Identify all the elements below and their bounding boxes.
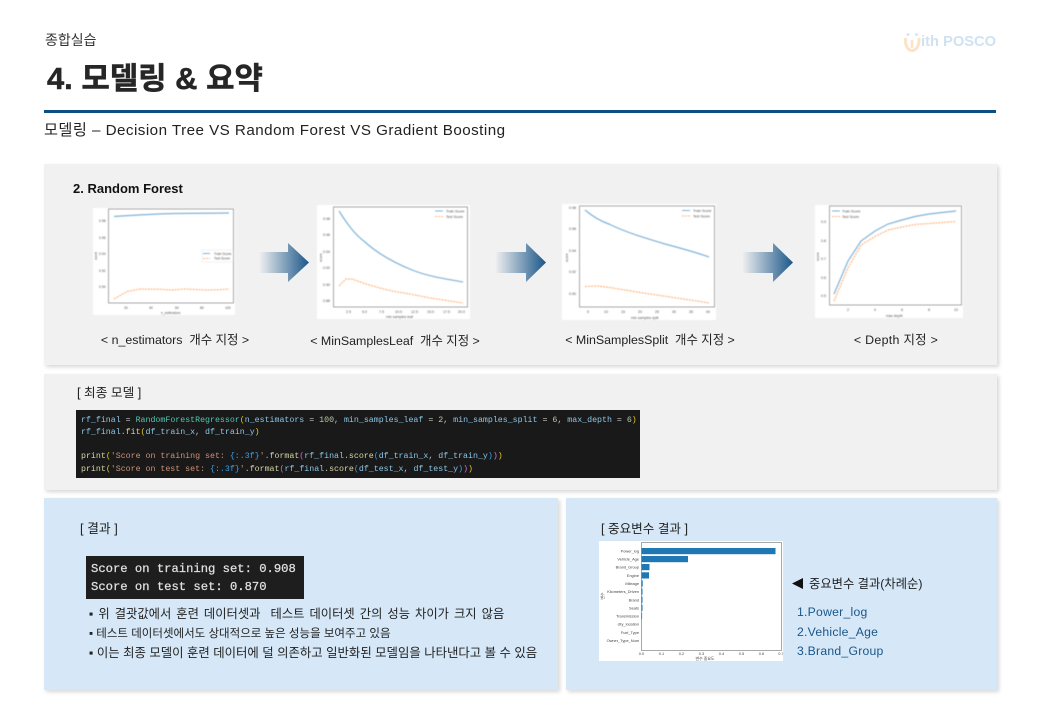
chart: min samples leaf: 17.5 [443, 310, 450, 314]
chart: n_estimators: 0.96 [99, 236, 106, 240]
chart: max depth: Train Score [842, 210, 860, 214]
chart: min samples split: 30 [672, 310, 676, 314]
chart: min samples split: 10 [604, 310, 608, 314]
chart: n_estimators: 60 [175, 306, 179, 310]
chart: n_estimators [93, 208, 235, 316]
chart: variable importance: Power_log [621, 548, 639, 554]
chart: max depth: 10 [954, 308, 958, 312]
chart: variable importance: 0.6 [759, 651, 764, 656]
top 3 variables: 1.Power_log 2.Vehicle_Age 3.Brand_Group [797, 605, 884, 658]
logo: With POSCO: ith POSCO [921, 34, 996, 50]
result bullets [89, 607, 537, 660]
chart: variable importance: 변수 중요도 [696, 656, 715, 661]
chart: variable importance [599, 541, 783, 661]
chart: min samples split: 20 [638, 310, 642, 314]
chart: max depth: 0.5 [821, 294, 826, 298]
chart: variable importance: Brand_Group [616, 564, 639, 570]
chart: variable importance: 0.1 [659, 651, 664, 656]
chart: min samples leaf: 12.5 [411, 310, 418, 314]
chart: max depth: score [816, 252, 820, 261]
chart: variable importance: Mileage [625, 581, 639, 586]
note: ranking heading: 중요변수 결과(차례순) [809, 577, 922, 591]
chart: n_estimators: 40 [149, 306, 153, 310]
score output [86, 556, 304, 599]
chart: min samples leaf: 0.98 [323, 217, 330, 221]
chart: min samples leaf: score [319, 253, 323, 262]
chart: min samples split: 0.92 [569, 270, 576, 274]
chart: max depth: 4 [874, 308, 876, 312]
chart: min samples leaf: 0.90 [323, 283, 330, 287]
chart: n_estimators: 20 [124, 306, 128, 310]
arrow [497, 243, 546, 282]
chart: min samples leaf: 0.92 [323, 266, 330, 270]
caption: MinSamplesSplit: < MinSamplesSplit 개수 지정 > [565, 333, 735, 347]
chart: variable importance: Vehicle_Age [617, 556, 639, 562]
caption: MinSamplesLeaf: < MinSamplesLeaf 개수 지정 > [310, 334, 480, 348]
chart: max depth: Test Score [842, 215, 859, 219]
chart: min samples split: 15 [621, 310, 625, 314]
score output: Score on training set: 0.908 Score on test set: 0.870 [91, 562, 296, 594]
chart: min samples leaf: 2.5 [346, 310, 351, 314]
chart: n_estimators: n_estimators [161, 311, 181, 315]
chart: min samples leaf: 20.0 [458, 310, 465, 314]
chart: max depth: 0.7 [821, 257, 826, 261]
chart: min samples split: min samples split [631, 316, 659, 320]
result bullets: ▪ 테스트 데이터셋에서도 상대적으로 높은 성능을 보여주고 있음 [89, 628, 391, 640]
chart: min samples leaf: 5.0 [362, 310, 367, 314]
chart: max depth: 6 [901, 308, 903, 312]
chart: min samples leaf: 7.5 [379, 310, 384, 314]
chart: max depth [815, 205, 963, 318]
chart: min samples leaf: Train Score [446, 209, 464, 213]
chart: n_estimators: score [94, 252, 98, 260]
chart: variable importance: 0.0 [639, 651, 645, 656]
chart: n_estimators: 80 [200, 306, 204, 310]
section label: 종합실습 [45, 32, 97, 48]
chart: variable importance: city_location [618, 622, 639, 626]
heading: final model: [ 최종 모델 ] [77, 386, 141, 400]
chart: n_estimators: Test Score [214, 256, 230, 260]
heading: Random Forest: 2. Random Forest [73, 181, 183, 196]
chart: variable importance: 0.2 [679, 651, 684, 656]
chart: max depth: 2 [847, 308, 849, 312]
chart: min samples leaf: Test Score [446, 215, 463, 219]
chart: max depth: max depth [886, 314, 903, 318]
panel: result [44, 498, 558, 690]
chart: min samples split: score [565, 253, 569, 262]
logo: With POSCO [904, 33, 996, 52]
chart: min samples leaf: 15.0 [427, 310, 434, 314]
heading: important variables: [ 중요변수 결과 ] [601, 522, 688, 536]
chart: min samples split [562, 204, 716, 320]
chart: variable importance: Brand [629, 598, 639, 602]
chart: max depth: 8 [928, 308, 930, 312]
chart: min samples split: 0.96 [569, 227, 576, 231]
chart: min samples leaf: 0.88 [323, 299, 330, 303]
heading: result: [ 결과 ] [80, 521, 118, 536]
chart: n_estimators: 0.98 [99, 219, 106, 223]
chart: n_estimators: 0.94 [99, 252, 106, 256]
chart: max depth: 0.9 [821, 220, 826, 224]
chart: max depth: 0.6 [821, 276, 826, 280]
icon: left pointer [792, 578, 803, 589]
chart: min samples split: 40 [706, 310, 710, 314]
chart: variable importance: 0.4 [719, 651, 725, 656]
chart: max depth: 0.8 [821, 239, 826, 243]
chart: min samples split: 0.90 [569, 292, 576, 296]
result bullets: ▪ 이는 최종 모델이 훈련 데이터에 덜 의존하고 일반화된 모델임을 나타낸다고 볼 수 있음 [89, 646, 537, 660]
chart: min samples split: Test Score [693, 214, 710, 218]
subtitle: 모델링 – Decision Tree VS Random Forest VS Gradient Boosting [44, 122, 506, 139]
chart: variable importance: Kilometers_Driven [607, 589, 639, 594]
chart: min samples split: 5 [587, 310, 589, 314]
chart: min samples split: 0.94 [569, 249, 576, 253]
chart: n_estimators: 0.92 [99, 269, 106, 273]
caption: n_estimators: < n_estimators 개수 지정 > [101, 333, 249, 347]
chart: variable importance: Owner_Type_Num [607, 638, 639, 643]
chart: variable importance: Transmission [616, 614, 639, 618]
chart: variable importance: 0.3 [699, 651, 704, 656]
title: 4. 모델링 & 요약 [47, 61, 263, 96]
chart: min samples split: 0.98 [569, 206, 576, 210]
result bullets: ▪ 위 결괏값에서 훈련 데이터셋과 테스트 데이터셋 간의 성능 차이가 크지 않음 [89, 607, 504, 621]
chart: min samples leaf: min samples leaf [386, 315, 413, 319]
chart: min samples leaf: 0.94 [323, 250, 330, 254]
chart: variable importance: Seats [629, 606, 639, 610]
caption: Depth: < Depth 지정 > [854, 333, 938, 347]
panel: important variables [566, 498, 997, 690]
chart: variable importance: 변수 [600, 592, 605, 600]
chart: min samples split: 25 [655, 310, 659, 314]
chart: variable importance: 0.5 [739, 651, 744, 656]
chart: min samples leaf [317, 205, 470, 319]
panel: final model [44, 374, 997, 490]
chart: n_estimators: 100 [225, 306, 231, 310]
code block: rf_final = RandomForestRegressor(n_estimators = 100, min_samples_leaf = 2, min_samples_split = 6, max_depth = 6) rf_final.fit(df_train_x, df_train_y) print('Score on training set: {:.3f}'.format(rf_final.score(df_train_x, df_train_y))) print('Score on test set: {:.3f}'.format(rf_final.score(df_test_x, df_test_y))) [81, 416, 637, 474]
arrow [744, 243, 793, 282]
chart: min samples split: 35 [689, 310, 693, 314]
chart: min samples split: Train Score [693, 209, 711, 213]
panel: random forest tuning [44, 164, 997, 365]
chart: variable importance: Fuel_Type [621, 630, 639, 635]
chart: variable importance: Engine [627, 573, 639, 578]
chart: min samples leaf: 0.96 [323, 233, 330, 237]
chart: min samples leaf: 10.0 [395, 310, 402, 314]
chart: n_estimators: 0.90 [99, 285, 106, 289]
arrow [261, 243, 309, 282]
chart: n_estimators: Train Score [214, 252, 232, 256]
